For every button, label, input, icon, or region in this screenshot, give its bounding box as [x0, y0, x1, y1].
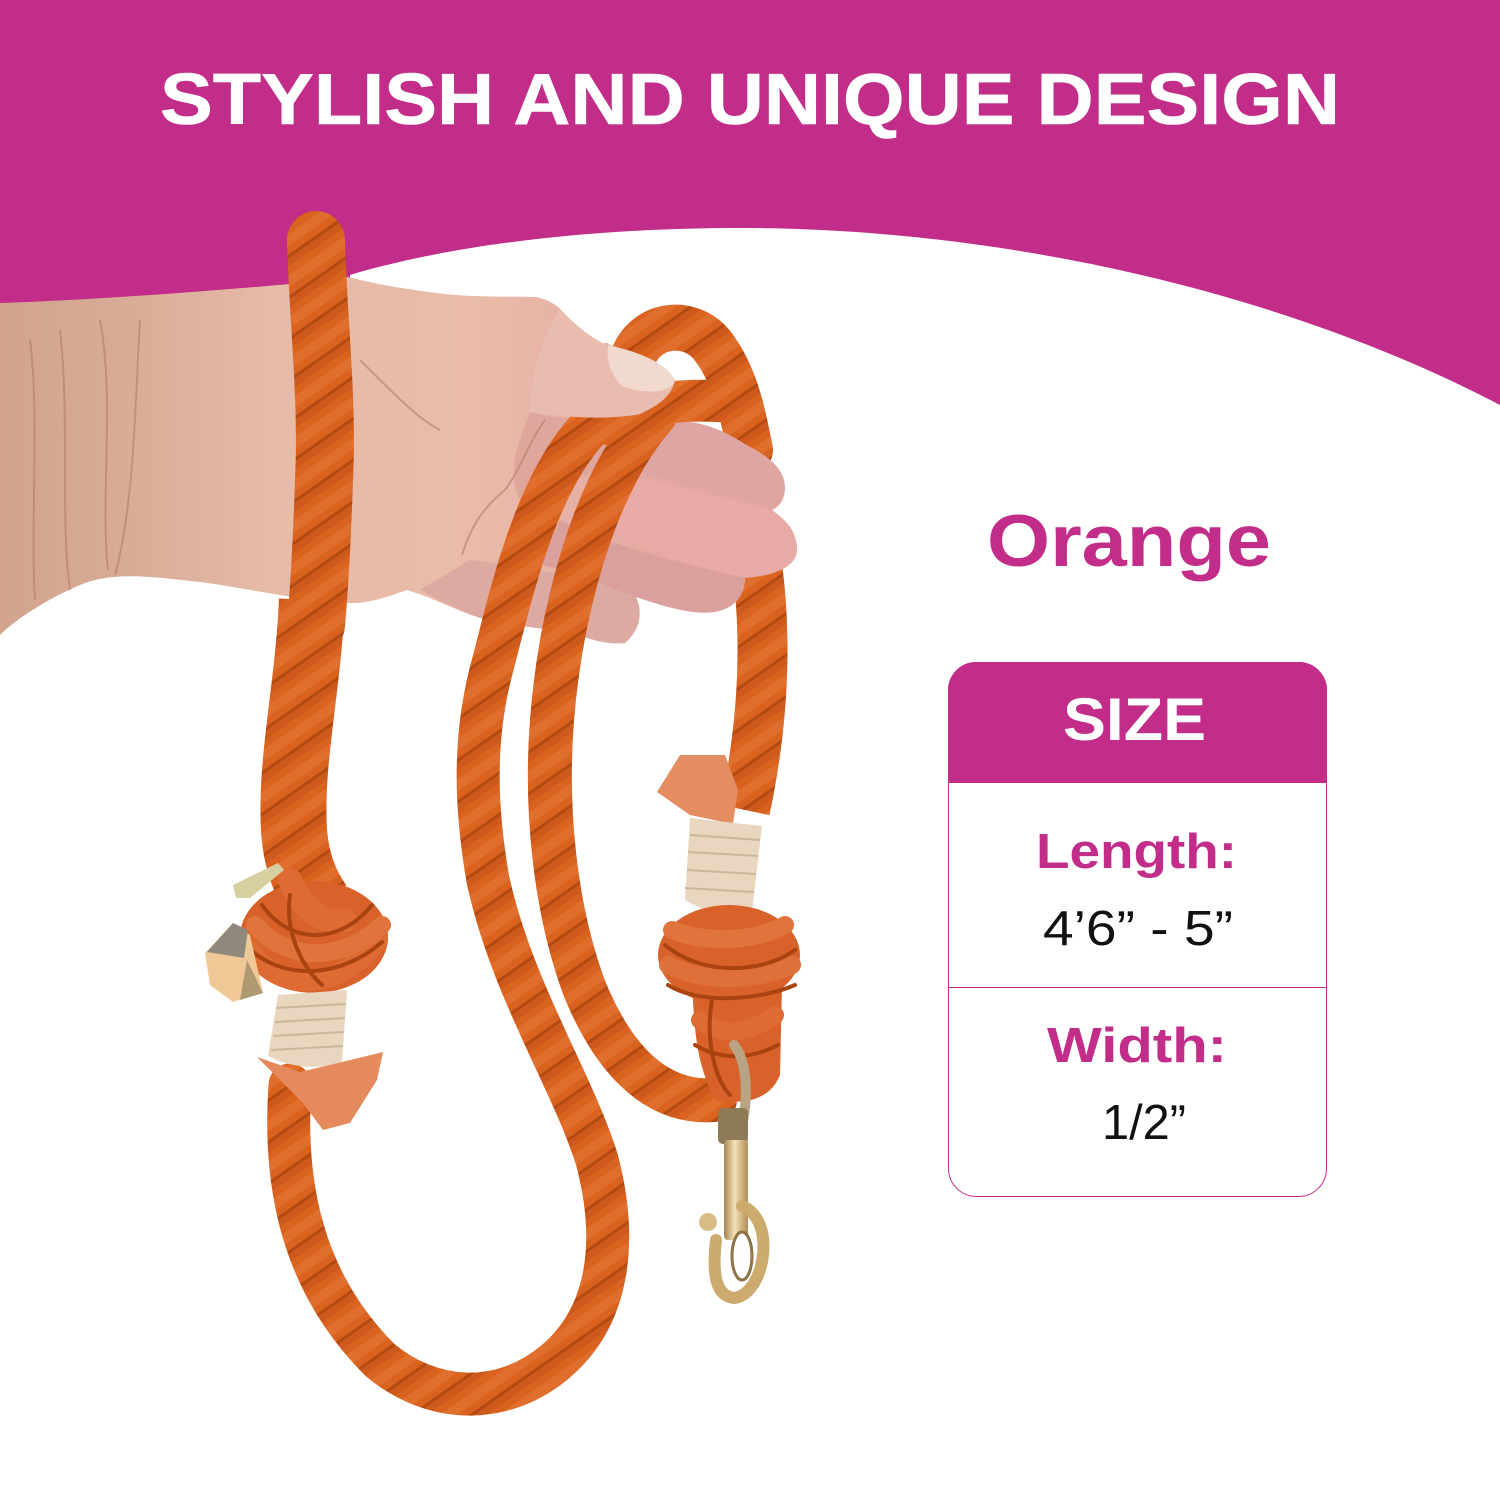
- icon: brass bell: [205, 923, 263, 1002]
- header banner with curved edge: [0, 0, 1500, 405]
- hand creases: [30, 320, 545, 600]
- table heading: SIZE: [1063, 686, 1206, 753]
- icon: right cord wrap: [685, 818, 762, 914]
- length value: 4’6” - 5”: [1043, 902, 1233, 956]
- icon: right frayed rope end: [657, 755, 738, 824]
- width value: 1/2”: [1102, 1096, 1186, 1150]
- hand: shadow below thumb: [514, 412, 640, 500]
- rope: inner strand: [550, 415, 715, 1100]
- hand: first finger: [620, 422, 785, 510]
- icon: left knot: [240, 880, 388, 993]
- hand: third finger: [540, 520, 745, 613]
- rope: upper handle strand: [316, 240, 325, 625]
- icon: hand holding the leash: [0, 277, 797, 643]
- hand: second finger: [590, 470, 797, 578]
- rope: right strand behind the fingers: [745, 565, 763, 810]
- rope: lower handle strand: [293, 600, 320, 905]
- icon: left cord wrap: [268, 990, 347, 1067]
- icon: right knot: [658, 905, 800, 1102]
- icon: brass clip ring: [233, 863, 284, 898]
- panel outline: [948, 662, 1326, 1196]
- rope: top loop behind the hand: [632, 328, 750, 450]
- length label: Length:: [1036, 825, 1237, 879]
- rope: knot under the thumb: [612, 401, 735, 425]
- icon: thumb with nail: [530, 309, 675, 418]
- table header fill: [948, 662, 1327, 783]
- rope: lower loop strand: [289, 425, 608, 1394]
- row divider: [948, 986, 1327, 988]
- panel: size table: [948, 662, 1327, 1196]
- icon: brass snap hook: [699, 1045, 763, 1298]
- color name heading: Orange: [987, 501, 1271, 582]
- icon: left frayed rope end: [257, 1052, 383, 1130]
- width label: Width:: [1047, 1019, 1227, 1073]
- hand: little finger: [420, 560, 640, 643]
- title: STYLISH AND UNIQUE DESIGN: [160, 60, 1340, 140]
- thumbnail: [608, 345, 675, 391]
